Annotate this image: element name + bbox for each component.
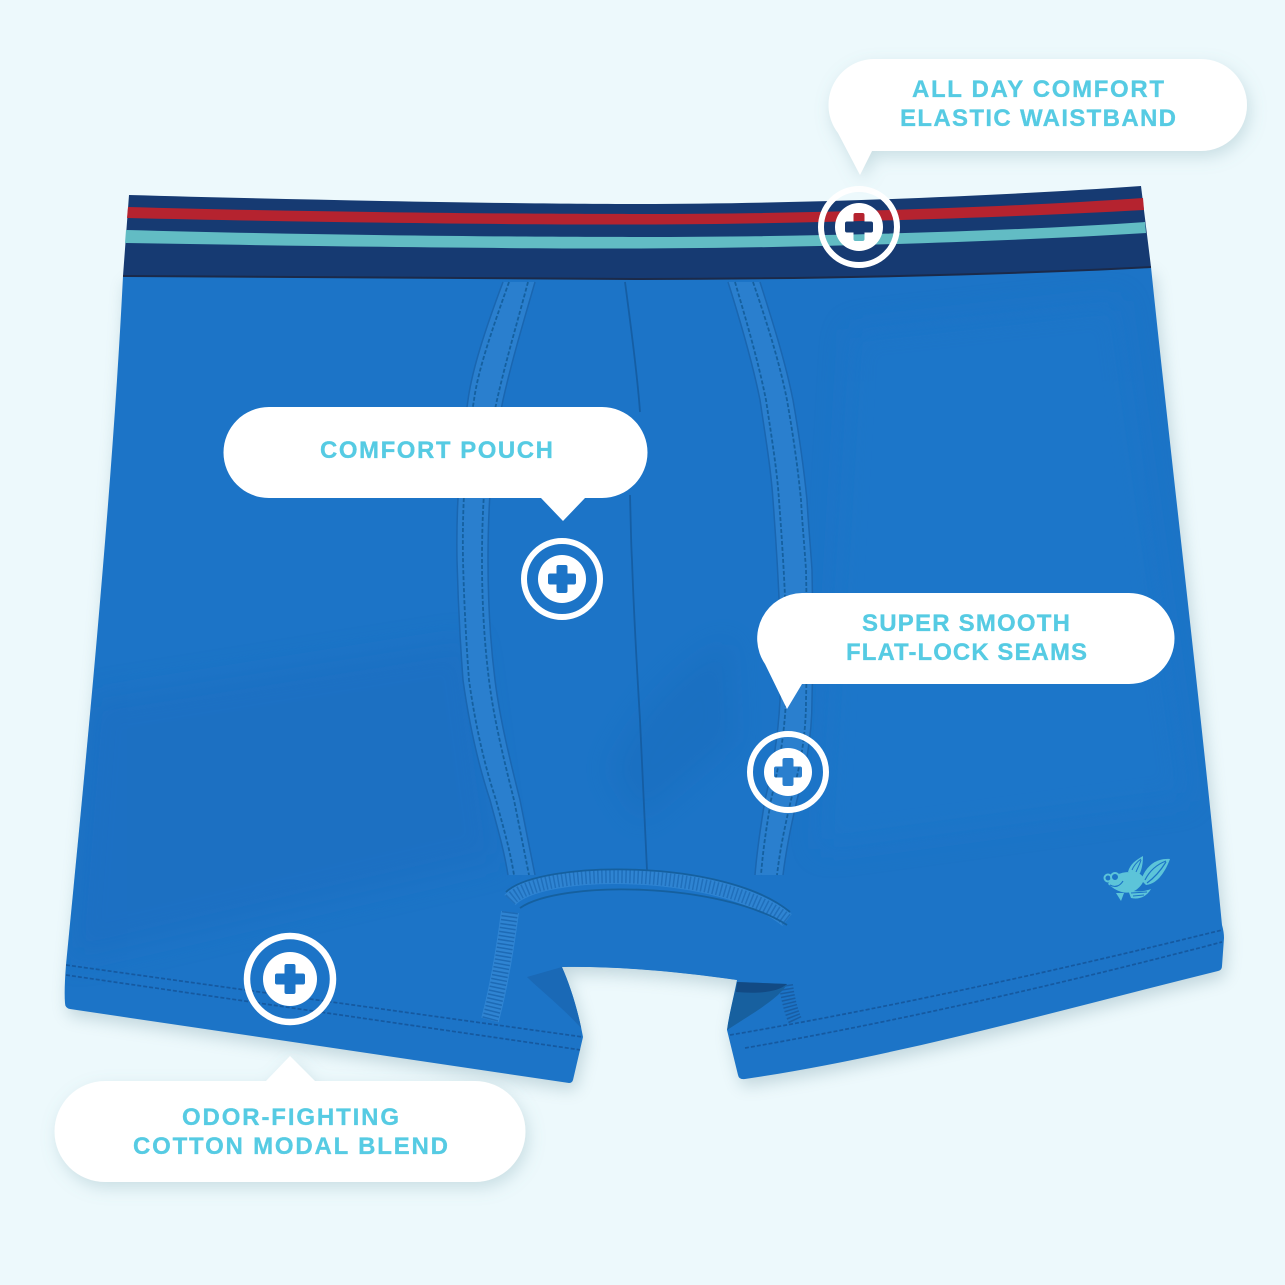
side seam stitching [490,912,510,1020]
teal stripe [125,222,1146,249]
bubble shape [828,59,1247,175]
gusset [564,966,737,980]
callout text [900,76,1176,132]
bubble shape [54,1056,526,1182]
callout: comfort pouch [224,407,648,521]
upper fin [1128,856,1143,875]
fish body [1108,872,1143,893]
callout: cotton modal blend [54,1056,526,1182]
big tail fin [1141,859,1170,885]
left pouch seam [457,282,535,875]
inner leg folds [527,967,583,1030]
hotspot: flat-lock seams [750,734,826,810]
centre fold [625,282,647,870]
icon: fish logo [1104,856,1170,901]
callout: flat-lock seams [757,593,1174,709]
garment body [65,267,1224,1083]
right pouch seam [728,282,813,875]
callout text: SUPER SMOOTH [862,610,1070,637]
boxer briefs [65,186,1227,1090]
callout text [846,610,1087,666]
hem stitching [66,965,583,1037]
callout text: ODOR-FIGHTING [182,1104,399,1131]
hotspot: cotton modal blend [247,936,333,1022]
waistband [123,186,1151,279]
callout text [133,1104,448,1160]
callout text: COMFORT POUCH [320,437,553,464]
callout text: FLAT-LOCK SEAMS [846,639,1087,666]
hotspot: comfort pouch [524,541,600,617]
lower fin [1128,889,1151,899]
fabric shading and seams [66,282,1222,1050]
callout text: ALL DAY COMFORT [912,76,1164,103]
callout text: ELASTIC WAISTBAND [900,105,1176,132]
callout: all day comfort [828,59,1247,175]
red stripe [127,198,1144,225]
bubble shape [757,593,1174,709]
bubble shape [224,407,648,521]
hotspot: waistband [821,189,897,265]
callout text: COTTON MODAL BLEND [133,1133,448,1160]
fish eyes [1104,874,1112,882]
garment shadow [68,274,1227,1090]
waistband navy [123,186,1151,279]
